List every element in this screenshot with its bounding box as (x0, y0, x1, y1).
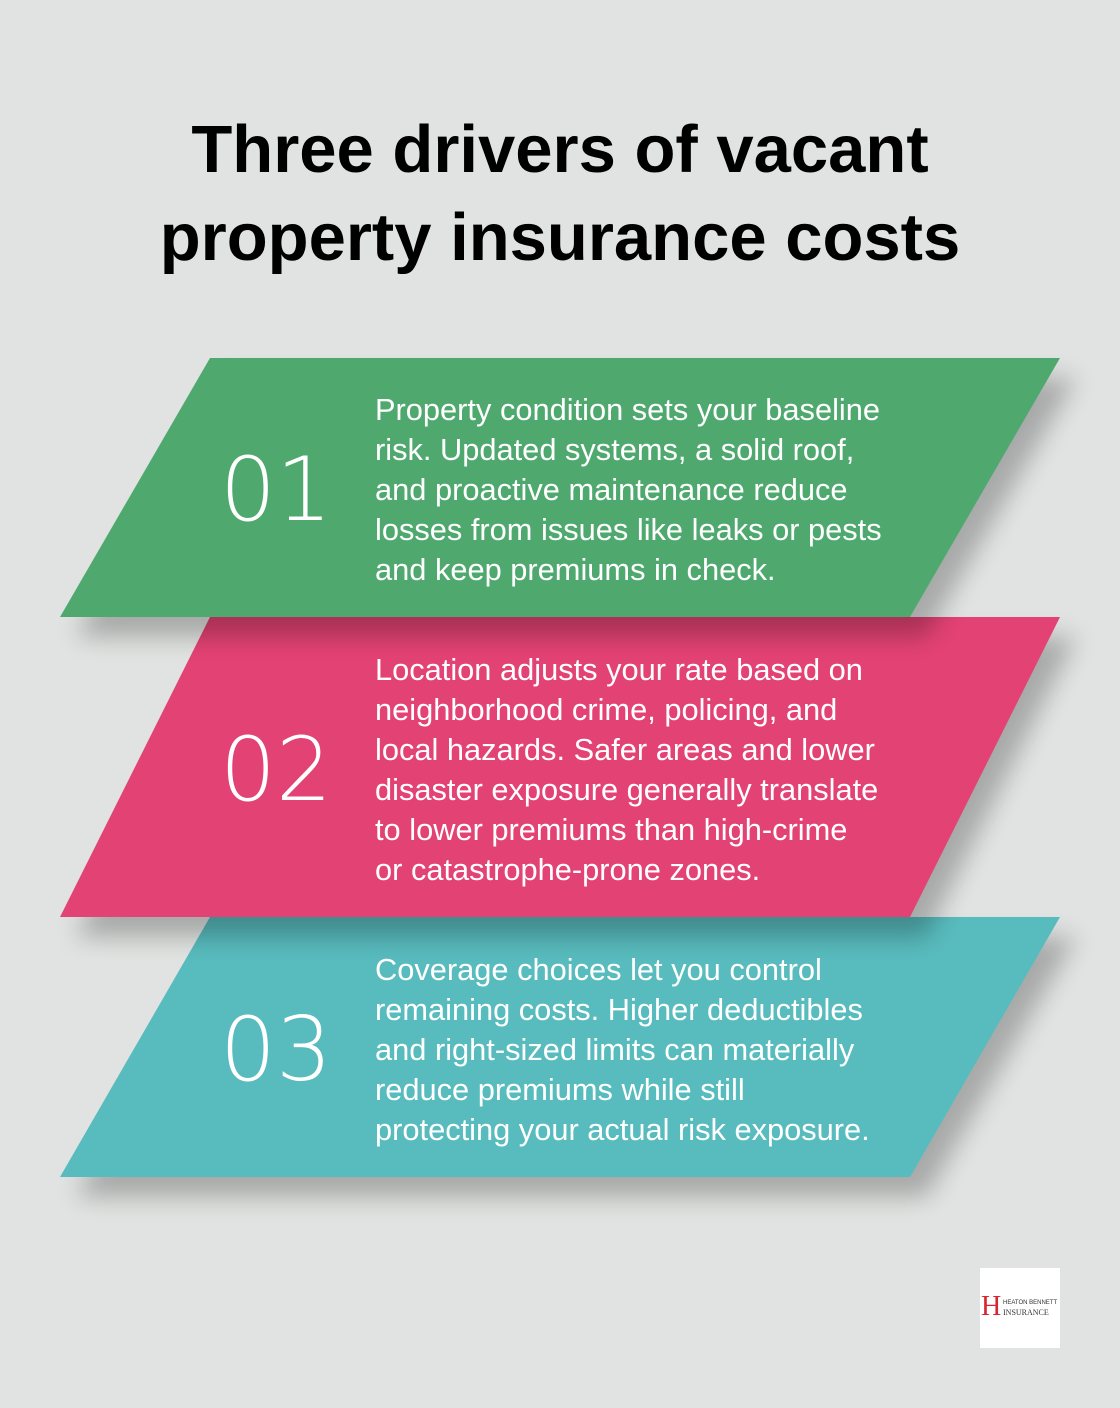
text 02: Location adjusts your rate based on (375, 652, 863, 687)
text 01: losses from issues like leaks or pests (375, 512, 882, 547)
title: Three drivers of vacant (191, 112, 929, 187)
text 02 (375, 652, 878, 887)
text 03 (375, 952, 870, 1147)
text 02: disaster exposure generally translate (375, 772, 878, 807)
text 02: local hazards. Safer areas and lower (375, 732, 875, 767)
text 01: risk. Updated systems, a solid roof, (375, 432, 854, 467)
logo (980, 1268, 1060, 1348)
number 03: 03 (220, 998, 332, 1101)
number 02: 02 (220, 718, 332, 821)
text 03: Coverage choices let you control (375, 952, 822, 987)
text 03: and right-sized limits can materially (375, 1032, 854, 1067)
panel: 02 (60, 617, 1076, 937)
text 01: Property condition sets your baseline (375, 392, 880, 427)
text 01 (375, 392, 882, 587)
text 02: neighborhood crime, policing, and (375, 692, 837, 727)
logo: H (981, 1291, 1001, 1322)
text 03: reduce premiums while still (375, 1072, 745, 1107)
title: property insurance costs (160, 200, 960, 275)
text 02: or catastrophe-prone zones. (375, 852, 760, 887)
text 03: remaining costs. Higher deductibles (375, 992, 863, 1027)
title (160, 112, 960, 275)
panel: 03 (60, 917, 1076, 1197)
logo: INSURANCE (1003, 1308, 1049, 1317)
text 01: and keep premiums in check. (375, 552, 776, 587)
logo: HEATON BENNETT (1003, 1300, 1057, 1306)
panel: 01 (60, 358, 1076, 637)
number 01: 01 (220, 438, 332, 541)
text 03: protecting your actual risk exposure. (375, 1112, 870, 1147)
text 02: to lower premiums than high-crime (375, 812, 847, 847)
text 01: and proactive maintenance reduce (375, 472, 848, 507)
